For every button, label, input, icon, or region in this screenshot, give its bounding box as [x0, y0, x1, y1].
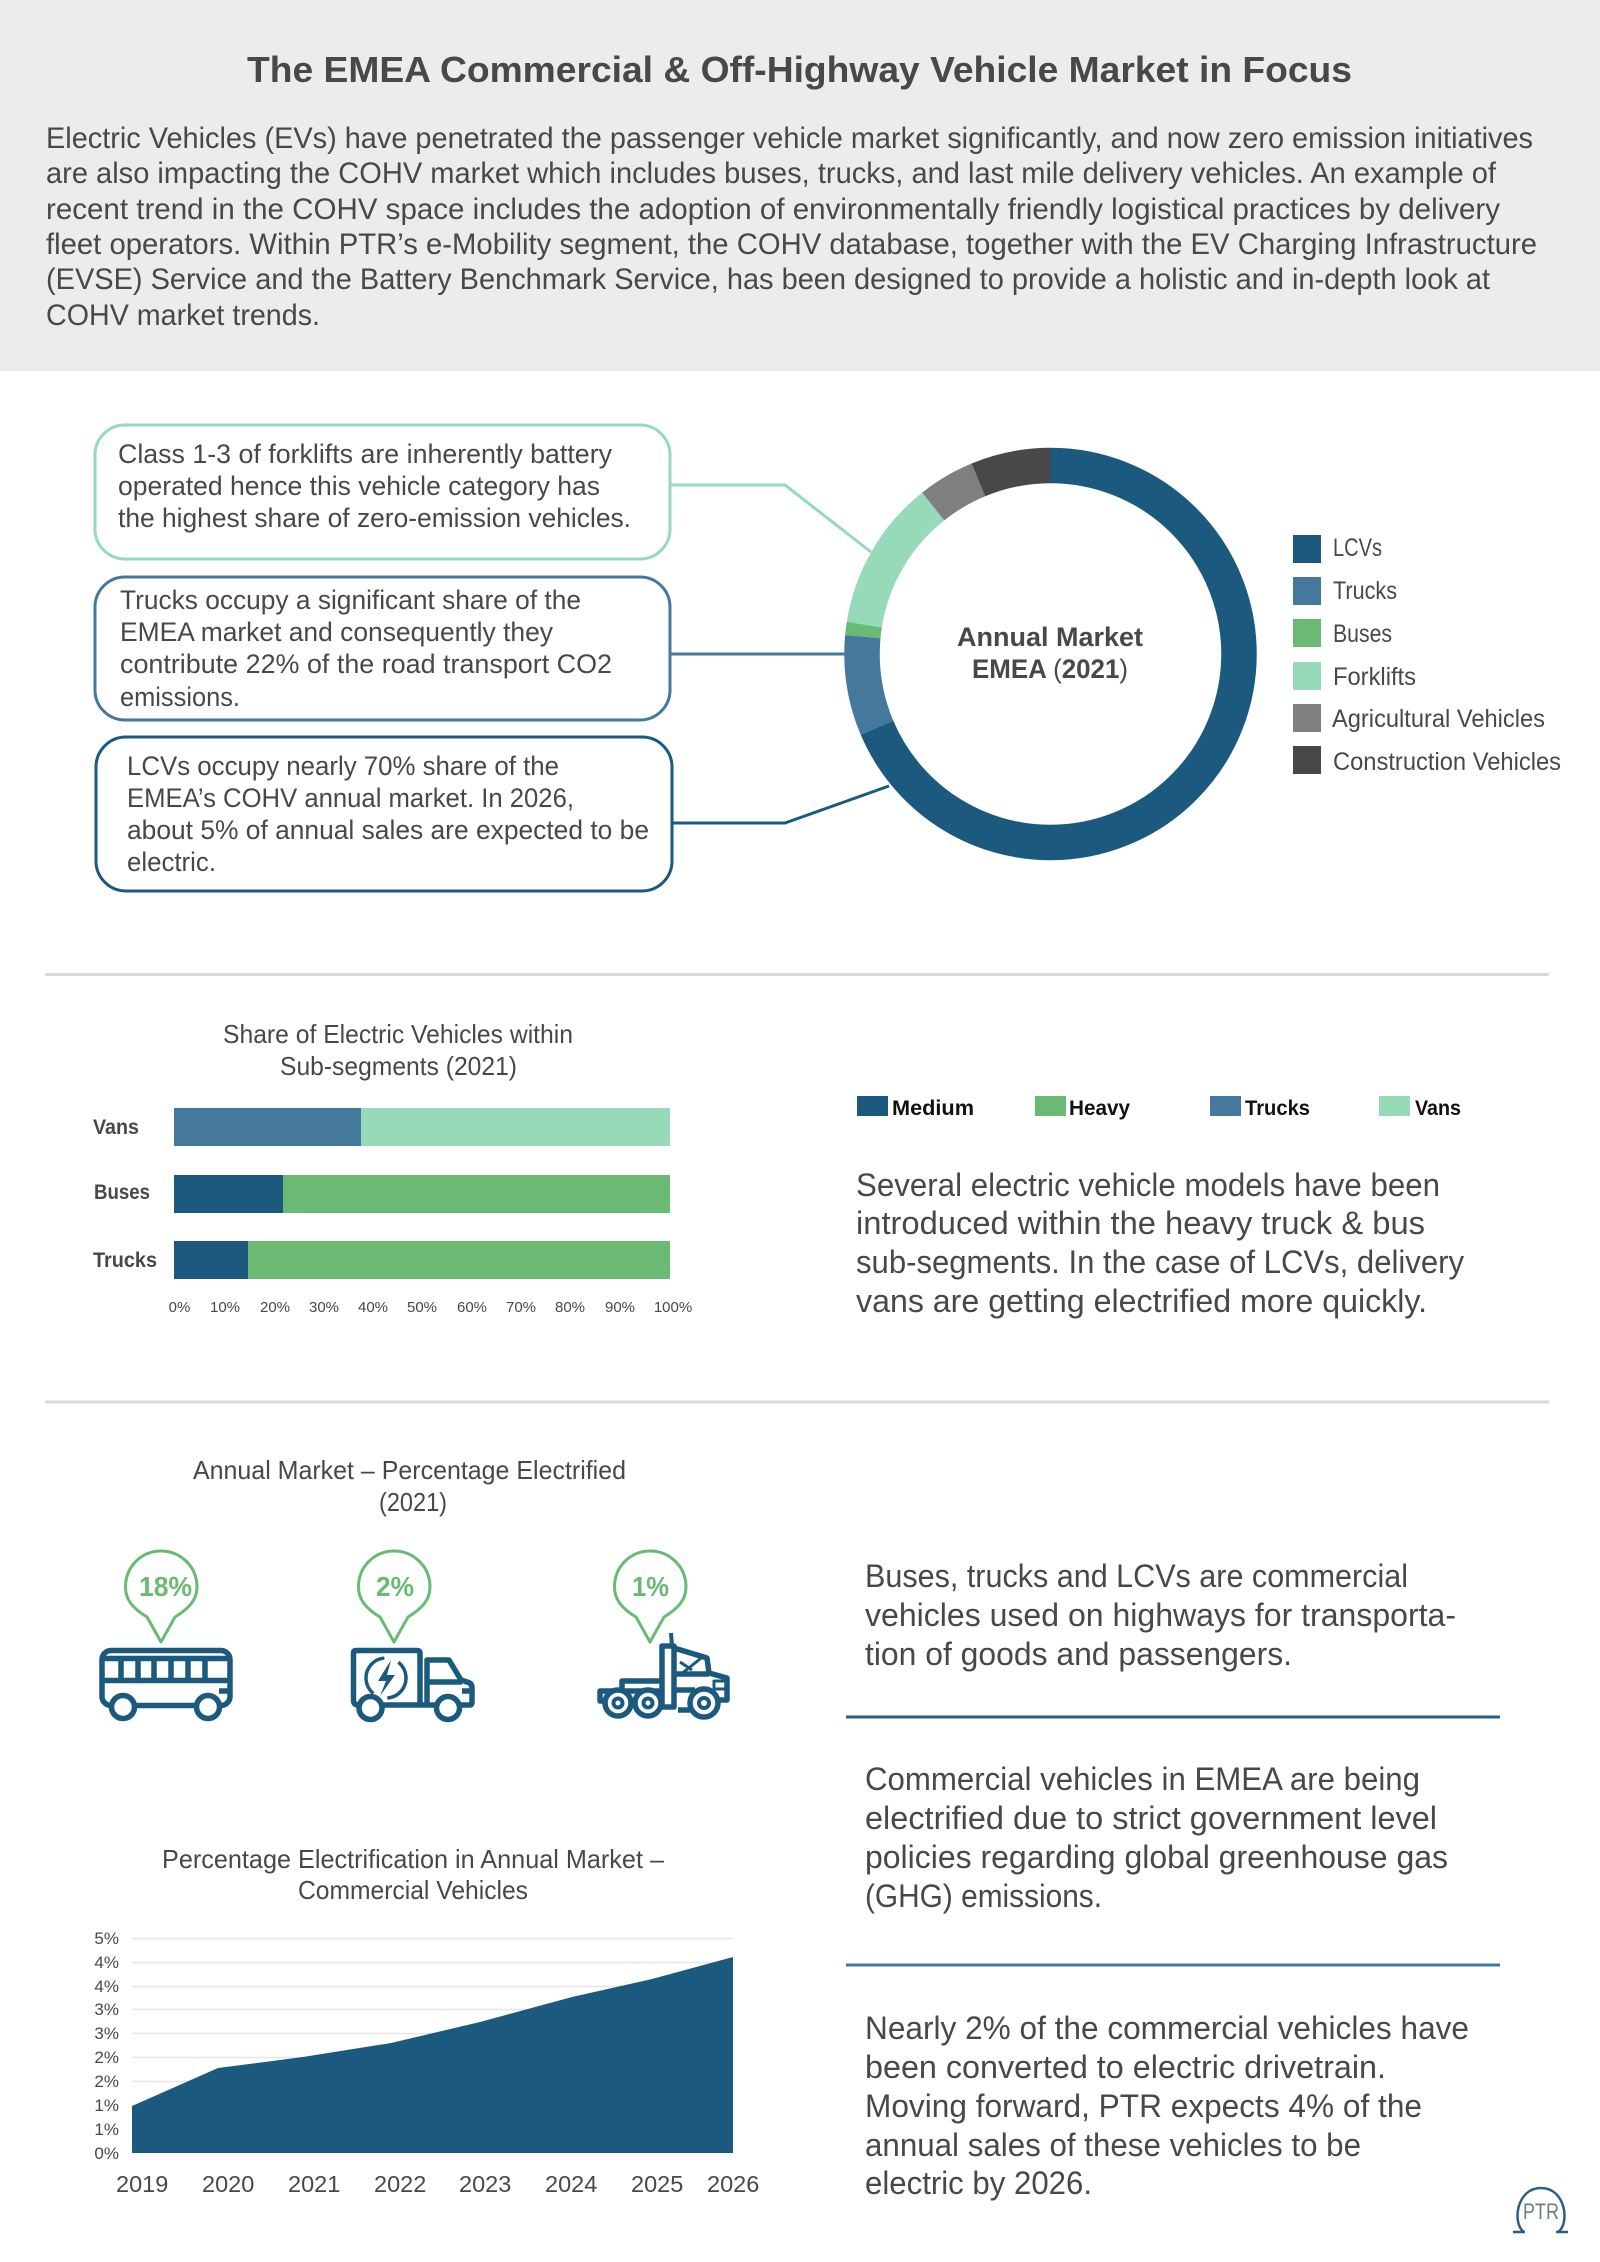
- text block: outlook: annual sales of these vehicles to be: [865, 2127, 1361, 2163]
- callout: LCVs: [96, 737, 672, 891]
- text block: commercial vehicles definition: Buses, trucks and LCVs are commercial: [865, 1558, 1408, 1594]
- y axis labels: 3%: [94, 2024, 119, 2043]
- donut legend: LCVs: [1333, 534, 1382, 562]
- panel: header: [0, 0, 1600, 371]
- percentage axis: 70%: [506, 1299, 536, 1316]
- callout pin: 1%: [614, 1551, 686, 1642]
- percentage axis: 20%: [260, 1299, 290, 1316]
- text block: electrification policies: electrified due to strict government level: [865, 1800, 1437, 1836]
- bar chart title: Share of Electric Vehicles within: [223, 1019, 573, 1049]
- bar chart legend: Trucks: [1245, 1097, 1310, 1120]
- text block: EV models: vans are getting electrified more quickly.: [856, 1283, 1427, 1319]
- x axis labels: 2021: [288, 2171, 340, 2197]
- text block: EV models: sub-segments. In the case of LCVs, delivery: [856, 1244, 1464, 1280]
- percentage axis: 100%: [654, 1299, 692, 1316]
- text block: EV models: introduced within the heavy truck & bus: [856, 1205, 1425, 1241]
- x axis labels: 2023: [459, 2171, 511, 2197]
- callout: LCVs: electric.: [127, 847, 216, 877]
- x axis labels: 2025: [631, 2171, 683, 2197]
- logo: PTR: [1513, 2188, 1568, 2232]
- intro paragraph: recent trend in the COHV space includes the adoption of environmentally friendly logistical practices by delivery: [46, 193, 1500, 226]
- icon: bus: [102, 1650, 230, 1718]
- percentage axis: [169, 1299, 692, 1316]
- area chart title: [162, 1844, 665, 1905]
- donut legend: Buses: [1333, 620, 1392, 648]
- callout: forklifts: operated hence this vehicle category has: [118, 471, 600, 501]
- bar chart legend: Medium: [892, 1097, 974, 1120]
- bars: [174, 1108, 670, 1279]
- percentage axis: 0%: [169, 1299, 190, 1316]
- callout: trucks: Trucks occupy a significant share of the: [120, 585, 581, 615]
- text block: electrification policies: (GHG) emissions.: [865, 1878, 1102, 1914]
- y axis labels: 0%: [94, 2144, 119, 2163]
- category labels: Buses: [94, 1181, 150, 1204]
- callout: LCVs: EMEA’s COHV annual market. In 2026,: [127, 783, 574, 813]
- text block: electrification policies: [865, 1761, 1448, 1914]
- bar chart legend: Vans: [1415, 1097, 1461, 1120]
- area series: [132, 1957, 733, 2153]
- callout: forklifts: Class 1-3 of forklifts are inherently battery: [118, 439, 612, 469]
- donut centre label: Annual Market: [957, 622, 1143, 652]
- callout pin: 1%: 1%: [632, 1571, 669, 1602]
- logo: PTR: PTR: [1523, 2199, 1559, 2224]
- text block: commercial vehicles definition: tion of goods and passengers.: [865, 1636, 1292, 1672]
- x axis labels: 2026: [707, 2171, 759, 2197]
- bar chart title: Sub-segments (2021): [280, 1051, 517, 1081]
- arrow: trucks connector: [670, 652, 846, 656]
- arrow: forklifts connector: [670, 485, 871, 552]
- bar chart legend: [857, 1096, 1461, 1120]
- intro paragraph: are also impacting the COHV market which includes buses, trucks, and last mile delivery vehicles. An example of: [46, 157, 1497, 190]
- area chart: percentage electrification: [94, 1844, 759, 2197]
- area chart title: Commercial Vehicles: [298, 1875, 528, 1905]
- callout pin: 2%: [358, 1551, 430, 1642]
- y axis labels: [94, 1929, 119, 2163]
- text block: commercial vehicles definition: vehicles used on highways for transporta-: [865, 1597, 1456, 1633]
- text block: outlook: been converted to electric drivetrain.: [865, 2049, 1386, 2085]
- text block: EV models: [856, 1167, 1464, 1319]
- x axis labels: 2024: [545, 2171, 597, 2197]
- y axis labels: 1%: [94, 2096, 119, 2115]
- category labels: [93, 1116, 157, 1272]
- icon: semi truck: [600, 1633, 727, 1717]
- callout pin: 2%: 2%: [376, 1571, 414, 1602]
- intro paragraph: [46, 122, 1537, 332]
- title: The EMEA Commercial & Off-Highway Vehicle Market in Focus: [247, 49, 1352, 90]
- y axis labels: 4%: [94, 1953, 119, 1972]
- arrow: LCVs connector: [670, 786, 889, 823]
- x axis labels: [116, 2171, 759, 2197]
- percentage axis: 10%: [210, 1299, 240, 1316]
- percentage axis: 60%: [457, 1299, 487, 1316]
- y axis labels: 3%: [94, 2000, 119, 2019]
- callout pin: 18%: [126, 1551, 197, 1642]
- text block: commercial vehicles definition: [865, 1558, 1456, 1672]
- bar chart legend: Heavy: [1069, 1097, 1130, 1120]
- callout: trucks: [95, 577, 670, 720]
- bar chart title: [223, 1019, 573, 1081]
- text block: outlook: Moving forward, PTR expects 4% of the: [865, 2088, 1422, 2124]
- y axis labels: 2%: [94, 2048, 119, 2067]
- y axis labels: 4%: [94, 1977, 119, 1996]
- x axis labels: 2020: [202, 2171, 254, 2197]
- donut centre label: [957, 622, 1143, 684]
- percentage axis: 30%: [309, 1299, 339, 1316]
- donut legend: Agricultural Vehicles: [1332, 705, 1545, 733]
- donut legend: Trucks: [1333, 577, 1397, 605]
- callout pin: 18%: 18%: [139, 1571, 192, 1602]
- y axis labels: 1%: [94, 2120, 119, 2139]
- callout: trucks: emissions.: [120, 682, 240, 712]
- category labels: Vans: [93, 1116, 139, 1139]
- text block: outlook: Nearly 2% of the commercial vehicles have: [865, 2010, 1469, 2046]
- text block: outlook: electric by 2026.: [865, 2165, 1092, 2201]
- percentage axis: 80%: [555, 1299, 585, 1316]
- percentage axis: 40%: [358, 1299, 388, 1316]
- heading: annual market percentage electrified: [193, 1455, 626, 1517]
- text block: EV models: Several electric vehicle models have been: [856, 1167, 1440, 1203]
- category labels: Trucks: [93, 1249, 157, 1272]
- intro paragraph: COHV market trends.: [46, 299, 320, 332]
- donut legend: [1293, 534, 1561, 776]
- callout: LCVs: LCVs occupy nearly 70% share of the: [127, 751, 559, 781]
- x axis labels: 2022: [374, 2171, 426, 2197]
- donut chart: annual market: [862, 466, 1239, 842]
- heading: annual market percentage electrified: Annual Market – Percentage Electrified: [193, 1455, 626, 1485]
- area chart title: Percentage Electrification in Annual Market –: [162, 1844, 665, 1874]
- intro paragraph: (EVSE) Service and the Battery Benchmark Service, has been designed to provide a holistic and in-depth look at: [46, 263, 1491, 296]
- callout: forklifts: [95, 425, 670, 559]
- y axis labels: 5%: [94, 1929, 119, 1948]
- y axis labels: 2%: [94, 2072, 119, 2091]
- intro paragraph: Electric Vehicles (EVs) have penetrated the passenger vehicle market significantly, and now zero emission initiatives: [46, 122, 1533, 155]
- bar chart: share of EVs within sub-segments: [93, 1019, 692, 1316]
- heading: annual market percentage electrified: (2021): [379, 1487, 447, 1517]
- x axis labels: 2019: [116, 2171, 168, 2197]
- icon: electric delivery truck: [354, 1650, 472, 1720]
- callout: trucks: contribute 22% of the road transport CO2: [120, 649, 612, 679]
- percentage axis: 90%: [605, 1299, 635, 1316]
- donut centre label: EMEA (2021): [972, 654, 1128, 684]
- callout: LCVs: about 5% of annual sales are expected to be: [127, 815, 649, 845]
- donut legend: Forklifts: [1333, 663, 1416, 691]
- intro paragraph: fleet operators. Within PTR’s e-Mobility segment, the COHV database, together with the EV Charging Infrastructure: [46, 228, 1537, 261]
- callout: forklifts: the highest share of zero-emission vehicles.: [118, 503, 631, 533]
- donut legend: Construction Vehicles: [1333, 748, 1561, 776]
- percentage axis: 50%: [407, 1299, 437, 1316]
- text block: electrification policies: Commercial vehicles in EMEA are being: [865, 1761, 1420, 1797]
- text block: electrification policies: policies regarding global greenhouse gas: [865, 1839, 1448, 1875]
- text block: outlook: [865, 2010, 1469, 2201]
- callout: trucks: EMEA market and consequently they: [120, 617, 553, 647]
